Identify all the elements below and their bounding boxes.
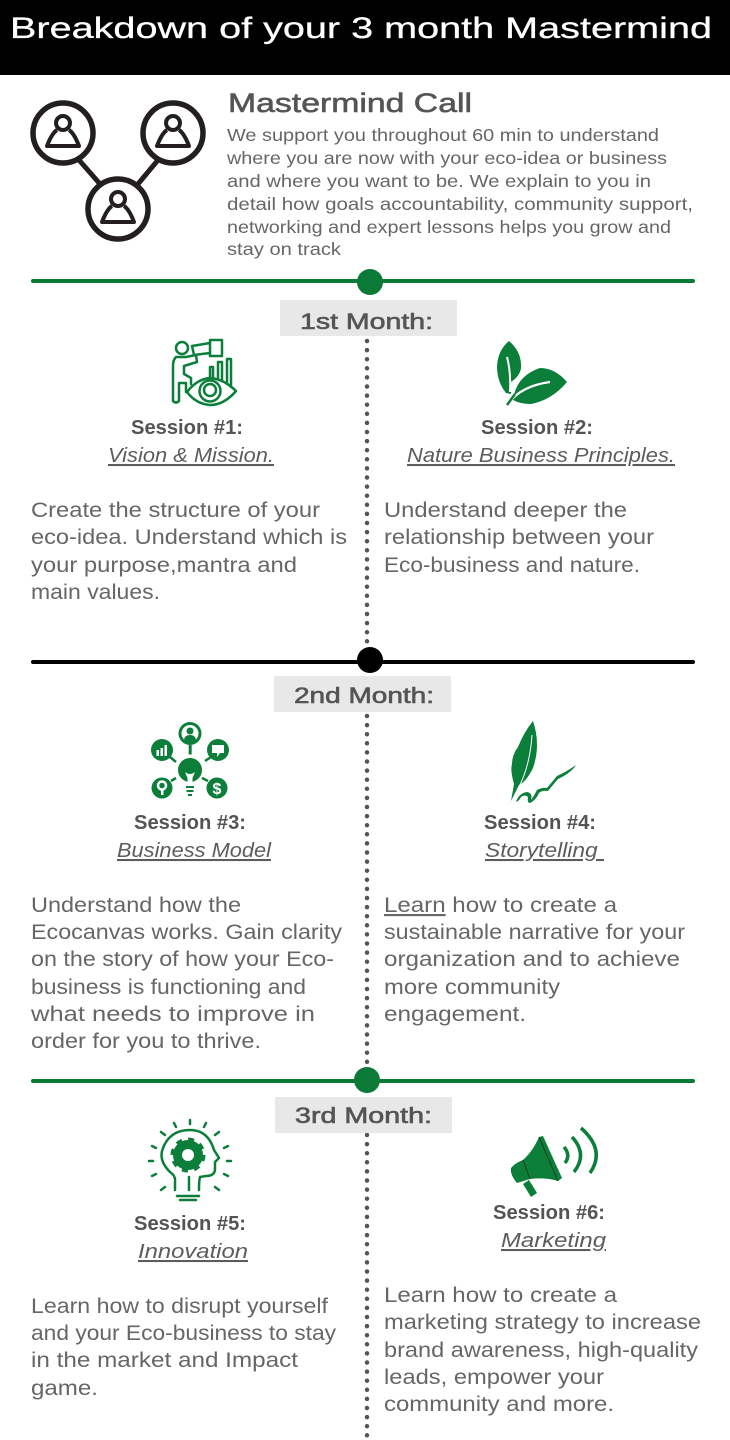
session 1 topic: Vision & Mission. [108,444,274,467]
title banner: Breakdown of your 3 month Mastermind [10,12,712,45]
session 5 description: Learn how to disrupt yourself [31,1294,328,1318]
session 4 description [384,893,685,1026]
session 3 description [30,893,342,1053]
icon: business model bulb: $ [213,781,222,798]
session 6 description: community and more. [384,1392,614,1416]
session 4 topic: Storytelling [485,839,604,862]
month label: 1st Month [280,300,457,336]
session 5 description: and your Eco-business to stay [31,1321,336,1345]
icon: green leaves [497,341,567,405]
session 1 description: main values. [31,580,160,604]
session 6 description: Learn how to create a [384,1283,617,1307]
session 1 description [31,498,347,604]
session 3 description: order for you to thrive. [31,1029,261,1053]
session 2 topic: Nature Business Principles. [407,444,675,467]
intro text block: and where you want to be. We explain to you in [227,171,651,191]
month label: 3rd Month: 3rd Month: [295,1103,432,1128]
session 6 heading: Session #6: [493,1202,605,1224]
session 3 description: business is functioning and [31,975,306,999]
session 3 description: Understand how the [31,893,241,917]
session 6 topic: Marketing [501,1229,607,1252]
dotted timeline month 2 [365,716,369,1066]
session 4 description: organization and to achieve [384,947,680,971]
session 2 description: relationship between your [384,525,654,549]
session 4 description: engagement. [384,1002,526,1026]
session 2 description [384,498,654,577]
icon: vision telescope and eye [173,340,236,405]
session 5 description: in the market and Impact [31,1348,298,1372]
session 5 heading: Session #5: [134,1213,246,1235]
session 4 description: sustainable narrative for your [384,920,685,944]
session 5 description: game. [31,1376,98,1400]
session 4 heading: Session #4: [484,812,596,834]
icon: quill feather [511,721,576,803]
session 1 description: Create the structure of your [31,498,320,522]
month label: 1st Month: 1st Month: [300,309,433,334]
intro text block: detail how goals accountability, community support, [227,194,693,214]
session 1 description: your purpose,mantra and [31,553,297,577]
intro text block: We support you throughout 60 min to understand [227,125,659,145]
session 5 description [31,1294,336,1400]
title banner [0,0,730,75]
dotted timeline month 1 [365,341,369,648]
dotted timeline month 3 [365,1135,369,1438]
month label: 2nd Month: 2nd Month: [294,683,434,708]
month label: 3rd Month [275,1097,452,1133]
session 3 heading: Session #3: [134,812,246,834]
session 3 topic: Business Model [117,839,273,862]
session 6 description: brand awareness, high-quality [384,1338,698,1362]
session 6 description: leads, empower your [384,1365,604,1389]
icon: megaphone [511,1128,596,1197]
icon: connected people network [33,103,203,239]
intro text block: stay on track [227,239,341,259]
session 3 description: Ecocanvas works. Gain clarity [31,920,342,944]
icon: business model bulb [151,722,229,798]
session 3 description: on the story of how your Eco- [31,947,334,971]
divider: month 1 timeline [31,269,695,295]
session 4 description: more community [384,975,560,999]
session 2 heading: Session #2: [481,417,593,439]
icon: innovation head with gear [149,1120,231,1200]
session 4 description: Learn how to create a [384,893,617,917]
session 6 description [384,1283,701,1416]
session 1 description: eco-idea. Understand which is [31,525,347,549]
session 2 description: Eco-business and nature. [384,553,640,577]
divider: month 3 timeline [31,1067,695,1093]
session 6 description: marketing strategy to increase [384,1310,701,1334]
divider: month 2 timeline [31,647,695,673]
intro text block [226,125,693,259]
intro text block: where you are now with your eco-idea or business [226,148,667,168]
heading: Mastermind Call: Mastermind Call [228,88,472,118]
intro text block: networking and expert lessons helps you grow and [227,217,671,237]
month label: 2nd Month [274,676,451,712]
session 3 description: what needs to improve in [30,1002,315,1026]
session 1 heading: Session #1: [131,417,243,439]
session 5 topic: Innovation [138,1240,248,1263]
session 2 description: Understand deeper the [384,498,627,522]
